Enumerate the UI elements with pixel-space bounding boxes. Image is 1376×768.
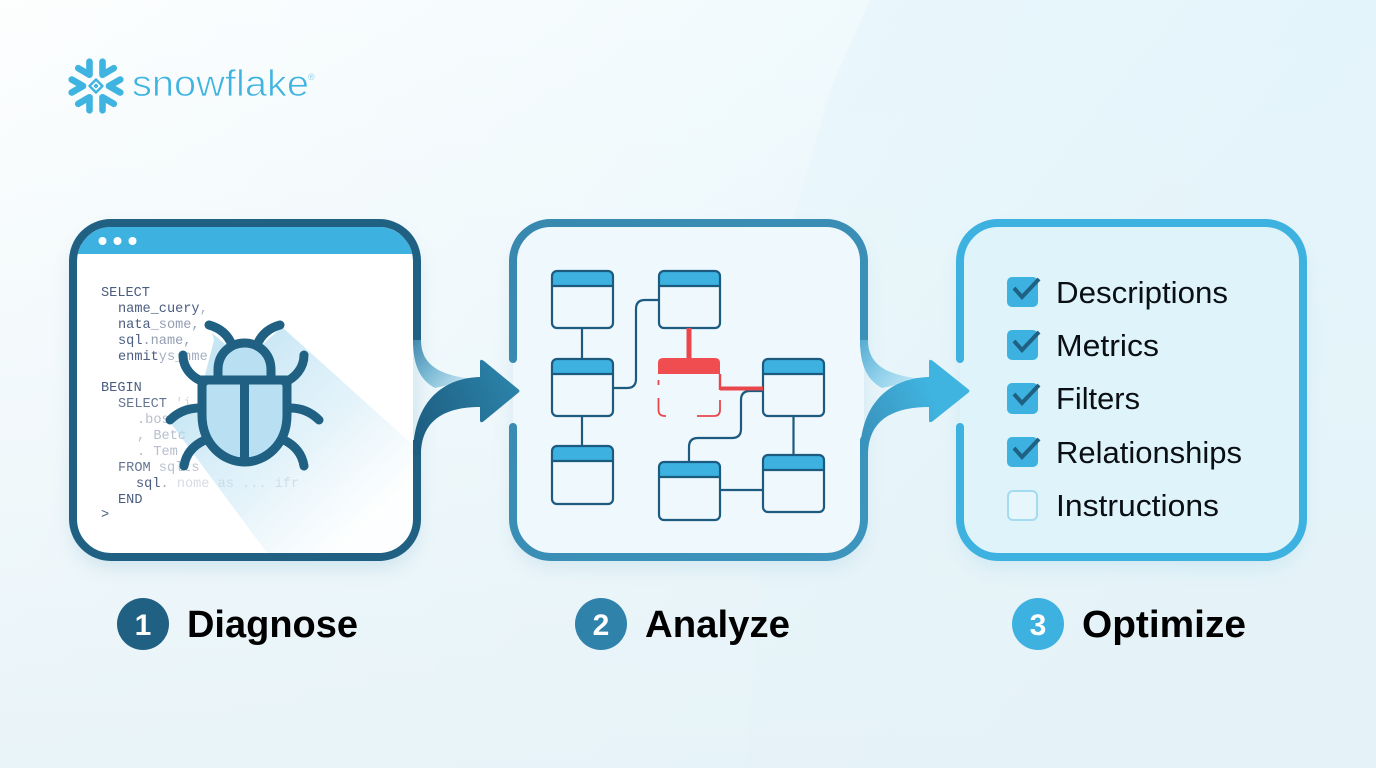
panel: optimize checklist xyxy=(960,223,1303,567)
step label: 2 Analyze xyxy=(575,598,790,650)
checklist item: Descriptions: Descriptions xyxy=(1056,275,1228,310)
bug long shadow xyxy=(170,327,413,553)
SQL code: SELECT 'i xyxy=(118,397,191,412)
SQL code: > xyxy=(101,508,109,523)
SQL code xyxy=(101,286,299,523)
bug head xyxy=(218,343,271,380)
step label: 1 Diagnose: 1 xyxy=(135,609,151,642)
checklist item: Metrics: Metrics xyxy=(1056,328,1159,363)
panel: analyze schema diagram xyxy=(513,223,864,567)
panel: diagnose code window xyxy=(73,223,417,567)
table: top centre xyxy=(659,271,720,328)
SQL code: SELECT xyxy=(101,286,150,301)
arrow tail xyxy=(413,340,475,388)
checklist item: Relationships: Relationships xyxy=(1056,435,1242,470)
step label: 1 Diagnose: Diagnose xyxy=(187,604,358,646)
wordmark: snowflake xyxy=(132,63,309,104)
panel border xyxy=(73,223,417,557)
logo: snowflake xyxy=(72,62,315,110)
table: middle left xyxy=(552,359,613,416)
window title bar xyxy=(77,227,413,261)
window body xyxy=(77,254,413,553)
SQL code: sql.name, xyxy=(118,334,191,349)
checklist item: Instructions: Instructions xyxy=(1056,488,1219,523)
step label: 1 Diagnose xyxy=(117,598,358,650)
arrow head and shaft xyxy=(413,360,520,455)
icon: snowflake mark xyxy=(72,62,120,110)
SQL code: END xyxy=(118,493,142,508)
arrow tail xyxy=(860,340,925,388)
registered mark: ® xyxy=(308,72,315,82)
connectors xyxy=(582,300,794,490)
bug body xyxy=(202,380,287,462)
panel fill xyxy=(513,223,864,557)
SQL code: FROM sqlts xyxy=(118,461,200,476)
SQL code: enmitys_nme xyxy=(118,350,208,365)
panel border xyxy=(960,223,1303,557)
SQL code: , Betc xyxy=(137,429,186,444)
panel fill xyxy=(960,223,1303,557)
table: bottom centre xyxy=(659,462,720,520)
SQL code: nata_some, xyxy=(118,318,200,333)
step label: 2 Analyze: 2 xyxy=(593,609,609,642)
step label: 2 Analyze: Analyze xyxy=(645,604,790,646)
arrow head and shaft xyxy=(860,360,970,455)
checklist item: Filters xyxy=(1007,381,1140,416)
window dots xyxy=(98,237,136,245)
panel border xyxy=(513,223,864,557)
SQL code: . Tem xyxy=(137,445,178,460)
step label: 3 Optimize xyxy=(1012,598,1246,650)
checklist item: Filters: Filters xyxy=(1056,381,1140,416)
SQL code: name_cuery, xyxy=(118,302,208,317)
panel shadow xyxy=(960,233,1303,567)
table: bottom right xyxy=(763,455,824,512)
broken table highlighted in red xyxy=(658,328,763,416)
icon: bug xyxy=(170,325,319,466)
SQL code: BEGIN xyxy=(101,381,142,396)
bug centre line and legs xyxy=(170,325,319,466)
checklist item: Metrics xyxy=(1007,328,1159,363)
panel shadow xyxy=(73,233,417,567)
arrow: analyze to optimize xyxy=(860,340,970,455)
table: top left xyxy=(552,271,613,328)
panel shadow xyxy=(513,233,864,567)
arrow: diagnose to analyze xyxy=(413,340,520,455)
SQL code: .bos xyxy=(137,413,170,428)
table: middle right xyxy=(763,359,824,416)
step label: 3 Optimize: 3 xyxy=(1030,609,1046,642)
step label: 3 Optimize: Optimize xyxy=(1082,604,1246,646)
SQL code: sql. nome as ... ifr xyxy=(136,477,299,492)
table: bottom left xyxy=(552,446,613,504)
